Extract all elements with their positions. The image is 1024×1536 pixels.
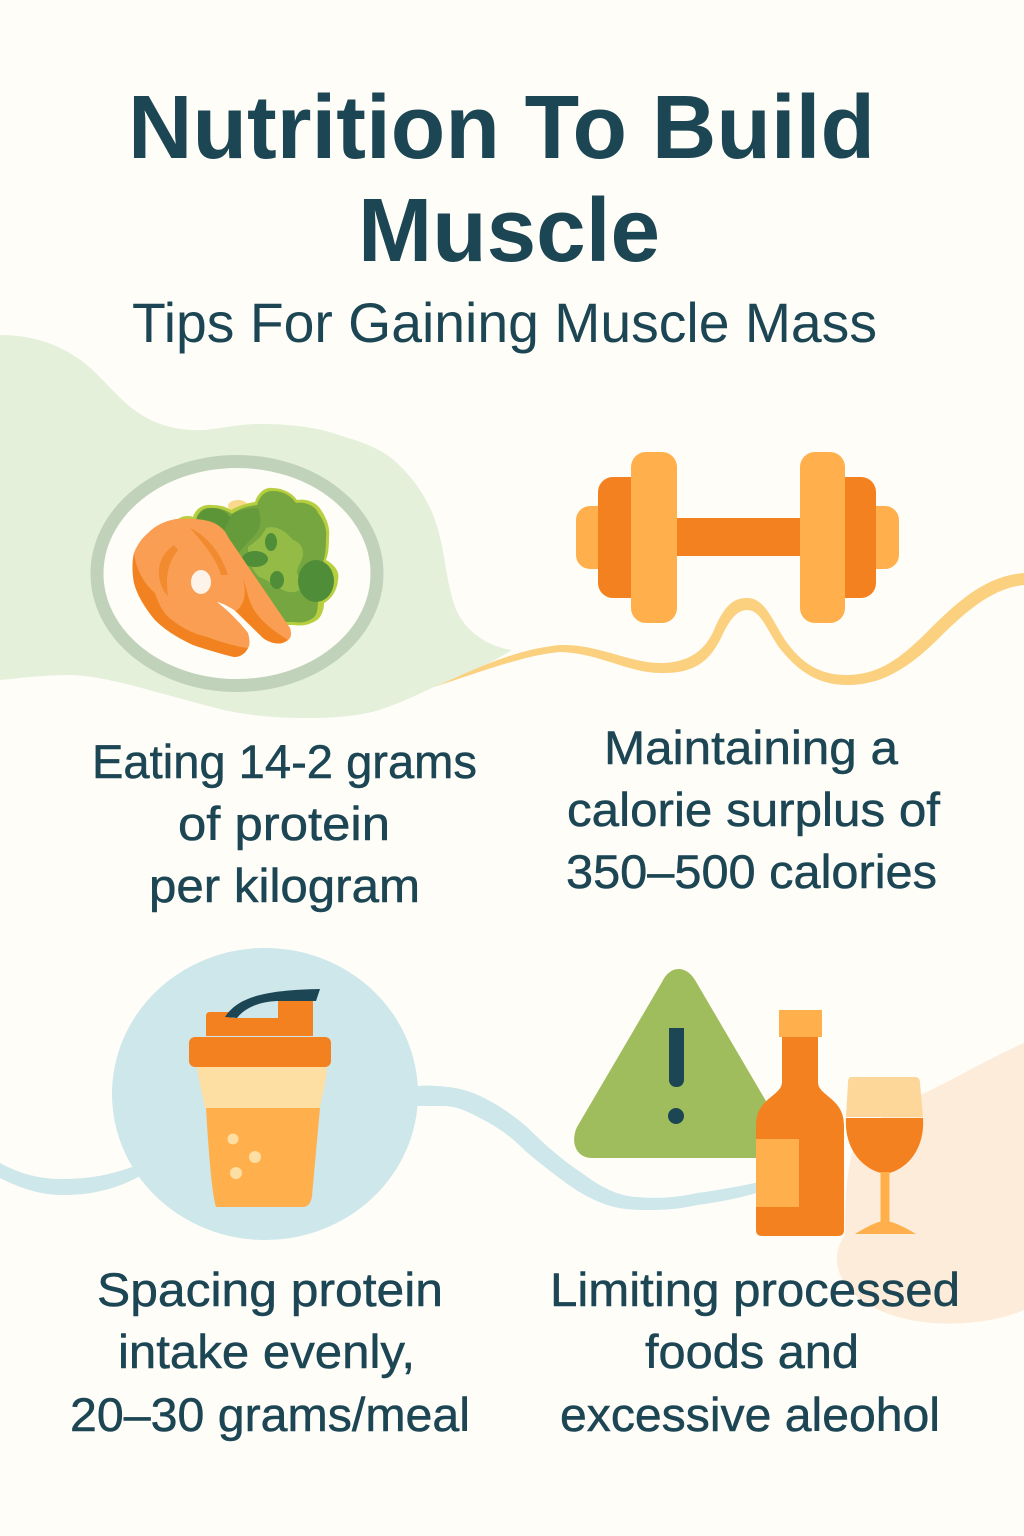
connector wave: yellow: [434, 573, 1024, 687]
text: limiting processed foods: excessive aleohol: [560, 1388, 940, 1441]
text: protein per kilogram: [92, 735, 477, 912]
text: limiting processed foods: [550, 1263, 960, 1441]
text: limiting processed foods: foods and: [645, 1325, 859, 1378]
icon: protein shaker: [112, 948, 418, 1240]
text: spacing protein: intake evenly,: [118, 1325, 415, 1378]
text: protein per kilogram: per kilogram: [149, 859, 420, 912]
text: limiting processed foods: Limiting processed: [550, 1263, 960, 1316]
background blob: peach: [837, 1043, 1024, 1324]
title: Nutrition To Build: [128, 78, 875, 178]
text: spacing protein: 20–30 grams/meal: [70, 1388, 470, 1441]
icon: bottle and wine glass: [756, 1010, 923, 1236]
text: protein per kilogram: Eating 14-2 grams: [92, 735, 477, 788]
text: calorie surplus: calorie surplus of: [567, 783, 941, 836]
text: calorie surplus: Maintaining a: [604, 721, 899, 774]
salmon: [132, 519, 291, 657]
icon: warning triangle: [574, 969, 784, 1158]
text: calorie surplus: [566, 721, 941, 898]
icon: salmon and broccoli plate: [97, 462, 377, 686]
text: calorie surplus: 350–500 calories: [566, 845, 937, 898]
title: [128, 78, 875, 281]
subtitle: Tips For Gaining Muscle Mass: [132, 291, 877, 354]
text: spacing protein: [70, 1263, 470, 1441]
broccoli: [176, 488, 338, 625]
text: protein per kilogram: of protein: [178, 797, 390, 850]
background blob: green: [0, 335, 512, 718]
connector wave: blue right: [410, 1086, 760, 1210]
connector wave: blue left: [0, 1163, 142, 1195]
title: Muscle: [358, 181, 660, 281]
icon: dumbbell: [576, 452, 899, 623]
text: spacing protein: Spacing protein: [97, 1263, 443, 1316]
